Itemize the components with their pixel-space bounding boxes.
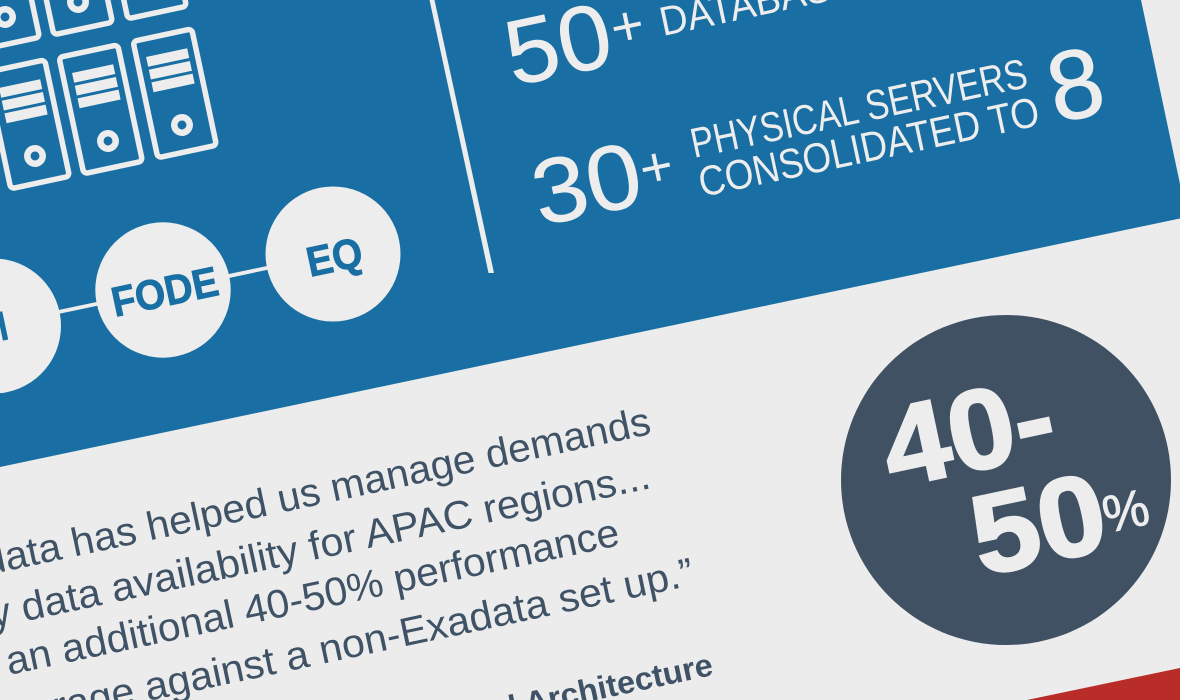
- icon: grid of database servers: [0, 0, 216, 205]
- panel: blue consolidation panel: [0, 0, 1180, 467]
- circle: FODE: FODE: [107, 257, 223, 326]
- stat: 30+ physical servers consolidated to 8: 30: [523, 123, 651, 246]
- panel: red panel corner: [1027, 668, 1180, 700]
- circle: partial feature label: [0, 258, 61, 394]
- callout: 40-50% performance circle: [841, 315, 1171, 645]
- customer quote: an additional 40-50% performance: [2, 511, 623, 684]
- stat: 30+ physical servers consolidated to 8: +: [633, 132, 679, 201]
- stat: 30+ physical servers consolidated to 8: CONSOLIDATED TO: [694, 88, 1043, 206]
- circle: EQ: [266, 186, 400, 322]
- callout: 40-50% performance circle: %: [1097, 478, 1154, 545]
- stat: 30+ physical servers consolidated to 8: 8: [1037, 25, 1113, 144]
- customer quote: y data availability for APAC regions...: [0, 454, 654, 637]
- customer quote: [0, 399, 698, 700]
- callout: 40-50% performance circle: 40-: [871, 352, 1065, 511]
- divider line: [430, 0, 494, 273]
- stat: 30+ physical servers consolidated to 8: [523, 25, 1113, 246]
- stat: 30+ physical servers consolidated to 8: PHYSICAL SERVERS: [686, 50, 1031, 167]
- stat: 50+ databases: [496, 0, 885, 106]
- circle: EQ: EQ: [302, 228, 367, 286]
- callout: 40-50% performance circle: 50: [960, 448, 1117, 599]
- circle: FODE: [95, 222, 231, 358]
- feature chain: connected circles: [0, 186, 400, 394]
